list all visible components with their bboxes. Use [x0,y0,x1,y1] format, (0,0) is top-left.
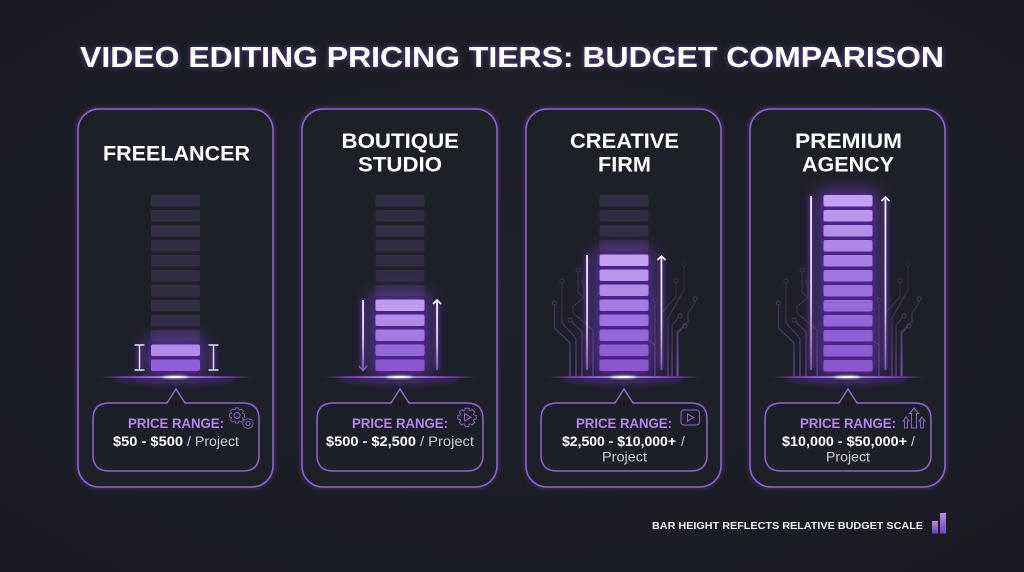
heading: FIRM [598,152,651,176]
price value: $2,500 - $10,000+ [562,433,676,449]
arrows [586,255,666,370]
legend text: BAR HEIGHT REFLECTS RELATIVE BUDGET SCALE [652,520,923,532]
price value: $500 - $2,500 [326,433,416,449]
panel: premium agency [750,109,945,487]
slash: / [681,434,685,449]
callout [317,389,483,471]
icon: gears [229,408,253,429]
baseline glow [324,375,475,385]
callout [93,389,259,471]
baseline glow [548,375,699,385]
heading: AGENCY [802,152,894,176]
icon: gear with play [458,408,476,426]
heading: CREATIVE [570,129,679,153]
panel: creative firm [526,109,721,487]
baseline glow [772,375,923,385]
bar chart [818,190,878,374]
bar chart [146,195,205,374]
price label: PRICE RANGE: [352,416,448,431]
card frame [750,109,945,487]
circuit traces [552,262,697,376]
card frame [302,109,497,487]
price unit: Project [602,450,647,464]
price unit: / Project [420,434,474,449]
price value: $50 - $500 [113,433,183,449]
callout [765,389,931,471]
heading [570,129,679,176]
price label: PRICE RANGE: [800,416,896,431]
heading: FREELANCER [103,142,250,166]
price value: $10,000 - $50,000+ [782,433,907,449]
heading: STUDIO [358,152,442,176]
panel: freelancer [78,109,273,487]
bar chart [370,195,430,374]
baseline glow [100,375,251,385]
card frame [526,109,721,487]
price unit: / Project [187,434,239,449]
heading: BOUTIQUE [342,129,459,153]
card frame [78,109,273,487]
price label: PRICE RANGE: [128,416,224,431]
heading [342,129,459,176]
heading: PREMIUM [795,129,902,153]
title: VIDEO EDITING PRICING TIERS: BUDGET COMPARISON [80,42,944,74]
circuit traces [776,262,921,376]
icon: mini bars [932,513,946,534]
price unit: Project [826,450,870,464]
height markers [134,345,218,370]
slash: / [911,434,915,449]
callout [541,389,707,471]
arrows [359,300,441,370]
legend note [652,513,946,534]
icon: rising arrows [903,408,925,428]
panel: boutique studio [302,109,497,487]
bar chart [594,195,654,374]
price label: PRICE RANGE: [576,416,672,431]
icon: play button [681,410,700,425]
arrows [810,196,890,370]
heading [795,129,902,176]
